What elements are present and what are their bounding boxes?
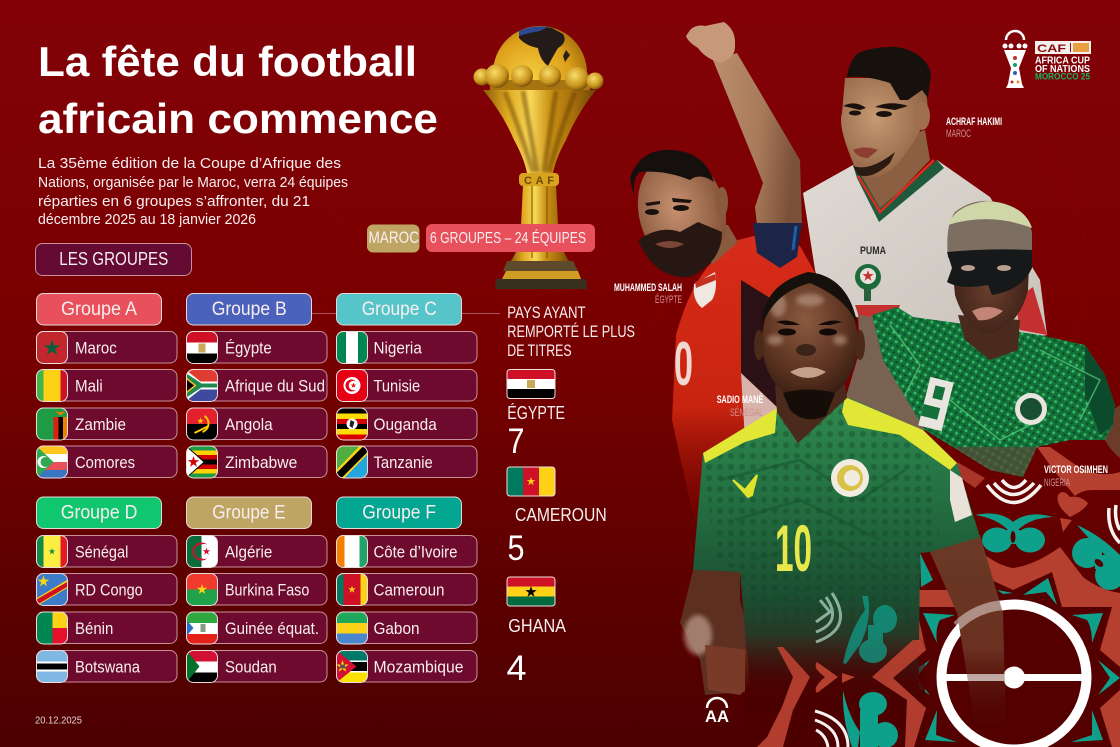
stat: Ghana <box>506 615 567 688</box>
team: Burkina Faso: Burkina Faso <box>225 582 309 600</box>
team: Guinée équatoriale <box>186 612 327 644</box>
team: Ouganda: Ouganda <box>374 416 438 434</box>
team: Soudan <box>186 650 327 682</box>
header: groupe A: Groupe A <box>61 299 137 320</box>
team: Sénégal: Sénégal <box>75 544 128 562</box>
heading: les groupes <box>36 244 192 276</box>
background pattern <box>0 40 1088 420</box>
ring over arm <box>945 605 1006 678</box>
panel: groupe B <box>186 294 327 478</box>
team: Égypte: Égypte <box>225 338 272 358</box>
stat: Égypte: 7 <box>508 422 524 461</box>
trophy balls <box>474 64 604 91</box>
team: Tunisie: Tunisie <box>374 378 420 396</box>
salmon lobe <box>872 640 926 747</box>
label: Achraf Hakimi: ACHRAF HAKIMI <box>946 116 1002 128</box>
team: Nigeria: Nigeria <box>374 340 423 358</box>
team: Zimbabwe <box>186 446 327 478</box>
head <box>762 278 858 399</box>
intro paragraph: réparties en 6 groupes s’affronter, du 21 <box>38 193 310 210</box>
white circle <box>942 604 1086 747</box>
eyes <box>645 198 692 215</box>
logo wordmark: AFRICA CUP <box>1035 56 1090 66</box>
mask <box>947 249 1032 295</box>
features <box>776 321 842 356</box>
team: Gabon: Gabon <box>374 620 420 638</box>
header: groupe C <box>336 294 462 325</box>
label: Achraf Hakimi: MAROC <box>946 128 971 140</box>
logo: Africa Cup of Nations <box>1002 31 1091 88</box>
badge: format: 6 GROUPES – 24 ÉQUIPES <box>430 230 586 247</box>
features <box>843 103 908 117</box>
team: Angola <box>186 408 327 440</box>
team: Zambie <box>36 408 177 440</box>
label: Victor Osimhen <box>1044 464 1108 489</box>
panel: groupe D <box>34 497 177 682</box>
armband <box>753 223 802 268</box>
trophy: CAF <box>524 175 554 187</box>
header: groupe C: Groupe C <box>362 299 437 320</box>
team: Côte d'Ivoire <box>336 536 477 568</box>
logo wordmark: MOROCCO 25 <box>1035 72 1090 82</box>
hair <box>847 47 931 100</box>
title: La fête du football <box>38 38 417 85</box>
title <box>38 38 438 142</box>
body fade <box>745 635 925 747</box>
logo trophy <box>1002 31 1028 88</box>
heading: most titles: REMPORTÉ LE PLUS <box>507 322 635 341</box>
flag: Égypte <box>507 370 555 398</box>
heading: most titles: DE TITRES <box>507 342 572 360</box>
scroll eyes <box>1010 531 1105 569</box>
intro paragraph: décembre 2025 au 18 janvier 2026 <box>38 211 256 228</box>
badge <box>950 470 972 522</box>
hair <box>762 272 858 328</box>
connector lines <box>312 312 500 314</box>
logo: AA: AA <box>705 707 729 726</box>
date: 20.12.2025 <box>35 716 82 726</box>
hearts <box>1058 492 1088 532</box>
hearts <box>816 662 855 693</box>
logo box: CAF <box>1037 43 1066 55</box>
trophy globe <box>493 26 587 120</box>
team: Cameroun <box>336 574 477 606</box>
player: Muhammed Salah: 0 <box>674 330 693 399</box>
header: groupe F <box>336 497 462 528</box>
stat: Égypte: ÉGYPTE <box>507 402 565 423</box>
badge: format <box>426 224 595 252</box>
team: Égypte <box>186 332 327 364</box>
team: Tanzanie: Tanzanie <box>374 454 433 472</box>
raised arm <box>713 53 802 225</box>
team: Soudan: Soudan <box>225 658 277 676</box>
salmon band <box>757 647 810 747</box>
trophy cup <box>483 90 596 173</box>
title: africain commence <box>38 95 438 142</box>
label: Sadio Mané: SADIO MANÉ <box>717 393 763 406</box>
header: groupe E: Groupe E <box>212 502 286 524</box>
team: Algérie <box>186 536 327 568</box>
trophy <box>474 26 604 289</box>
player: Victor Osimhen <box>845 201 1120 477</box>
team: RD Congo <box>34 574 177 608</box>
right arm <box>930 535 1006 725</box>
team: Botswana: Botswana <box>75 658 141 676</box>
intro paragraph <box>38 155 348 228</box>
team: Algérie: Algérie <box>225 544 272 562</box>
team: Maroc <box>36 332 177 364</box>
highlights <box>767 293 847 345</box>
neck <box>775 385 847 443</box>
team: Cameroun: Cameroun <box>374 582 444 600</box>
header: groupe E <box>186 497 312 528</box>
team: Gabon <box>336 612 477 644</box>
player: Muhammed Salah <box>625 22 818 525</box>
mouth <box>972 307 1003 320</box>
stat: Cameroun: 5 <box>508 529 524 568</box>
teal scroll lower <box>843 690 898 747</box>
header: groupe F: Groupe F <box>362 502 436 524</box>
head <box>841 78 928 178</box>
header: groupe D: Groupe D <box>61 502 137 524</box>
player: Achraf Hakimi: PUMA <box>860 245 886 257</box>
crest <box>1015 393 1047 425</box>
player: Sadio Mané <box>680 272 1006 747</box>
intro paragraph: Nations, organisée par le Maroc, verra 24 équipes <box>38 174 348 191</box>
dark star <box>893 572 1120 747</box>
logo: AA <box>705 698 729 726</box>
jersey: Nigeria <box>872 307 1115 477</box>
stat: Ghana: 4 <box>506 649 526 688</box>
shoulders <box>703 408 777 463</box>
team: Comores <box>36 446 177 478</box>
label: Muhammed Salah: MUHAMMED SALAH <box>614 282 682 294</box>
motif foreground <box>745 593 1006 747</box>
team: Mali: Mali <box>75 378 103 396</box>
white chevrons lower <box>815 711 848 747</box>
label: Achraf Hakimi <box>946 116 1002 140</box>
label: Victor Osimhen: NIGERIA <box>1044 477 1070 489</box>
team: Botswana <box>36 650 177 682</box>
label: Sadio Mané: SÉNÉGAL <box>730 406 763 419</box>
bare arm <box>845 315 925 432</box>
flag: Cameroun <box>507 467 555 496</box>
logo wordmark: OF NATIONS <box>1035 64 1090 75</box>
badge: host: MAROC <box>368 228 419 247</box>
heading: les groupes: LES GROUPES <box>59 248 168 269</box>
jersey: Egypt <box>672 232 818 525</box>
flag: Ghana <box>507 577 555 606</box>
hair <box>630 150 714 198</box>
puma logo <box>733 475 757 497</box>
teal scroll on jersey <box>843 596 897 664</box>
intro paragraph: La 35ème édition de la Coupe d’Afrique des <box>38 155 341 172</box>
label: Sadio Mané <box>717 393 763 419</box>
neck <box>958 315 1020 360</box>
jersey: Morocco <box>803 160 1047 345</box>
team: Maroc: Maroc <box>75 340 117 358</box>
panel: groupe C <box>334 294 477 481</box>
heading: most titles <box>507 304 635 360</box>
team: Zimbabwe: Zimbabwe <box>225 454 297 472</box>
team: Bénin <box>36 612 177 644</box>
crest <box>855 264 881 301</box>
shirt number: 10 <box>775 511 812 585</box>
white chevrons <box>987 480 1120 543</box>
header: groupe B <box>186 294 312 325</box>
team: Ouganda <box>336 408 477 440</box>
teal scrolls <box>920 514 1120 590</box>
crest <box>831 459 869 497</box>
panel: groupe F <box>336 497 477 682</box>
stat: Cameroun: CAMEROUN <box>515 504 607 525</box>
hair <box>947 201 1032 258</box>
team: Angola: Angola <box>225 416 273 434</box>
header: groupe B: Groupe B <box>212 299 287 320</box>
team: Afrique du Sud <box>186 370 327 402</box>
team: Tunisie <box>336 370 477 402</box>
stat: Ghana: GHANA <box>508 615 567 636</box>
team: Tanzanie <box>336 446 478 478</box>
jersey: Senegal <box>693 397 980 747</box>
neck <box>853 130 930 212</box>
player: Achraf Hakimi <box>803 47 1047 345</box>
team: Guinée équatoriale: Guinée équat. <box>225 620 319 638</box>
panel: most titles <box>506 304 635 688</box>
team: Bénin: Bénin <box>75 620 113 638</box>
header: groupe A <box>36 294 162 325</box>
heading: most titles: PAYS AYANT <box>507 304 586 322</box>
beard <box>638 222 722 277</box>
neck <box>700 225 738 265</box>
team: Comores: Comores <box>75 454 135 472</box>
team: Sénégal <box>36 536 177 568</box>
trophy stem <box>510 185 570 262</box>
head <box>950 232 1030 334</box>
team: Mozambique: Mozambique <box>374 658 464 676</box>
left arm <box>680 570 755 695</box>
salmon ground <box>872 547 1120 747</box>
stat: Égypte <box>507 402 565 461</box>
team: RD Congo: RD Congo <box>75 582 143 600</box>
panel: groupe A <box>36 294 177 478</box>
collar <box>853 160 944 222</box>
team: Mozambique <box>336 650 477 682</box>
teal corners <box>903 578 1120 742</box>
team: Burkina Faso <box>186 574 327 606</box>
head <box>625 145 739 279</box>
label: Muhammed Salah: ÉGYPTE <box>655 293 682 306</box>
decorative motif <box>872 447 1120 747</box>
chevrons on jersey <box>816 593 841 642</box>
shirt number <box>918 377 954 431</box>
panel: groupe E <box>186 497 327 682</box>
team: Côte d'Ivoire: Côte d’Ivoire <box>374 544 458 562</box>
team: Nigeria <box>336 332 477 364</box>
trophy base <box>503 261 578 271</box>
logo wordmark <box>1035 56 1090 82</box>
team: Mali <box>36 370 177 402</box>
badge: host <box>367 224 420 252</box>
team: Zambie: Zambie <box>75 416 126 434</box>
team: Afrique du Sud: Afrique du Sud <box>225 378 325 396</box>
stat: Cameroun <box>508 504 607 568</box>
label: Muhammed Salah <box>614 282 682 306</box>
header: groupe D <box>36 497 162 528</box>
